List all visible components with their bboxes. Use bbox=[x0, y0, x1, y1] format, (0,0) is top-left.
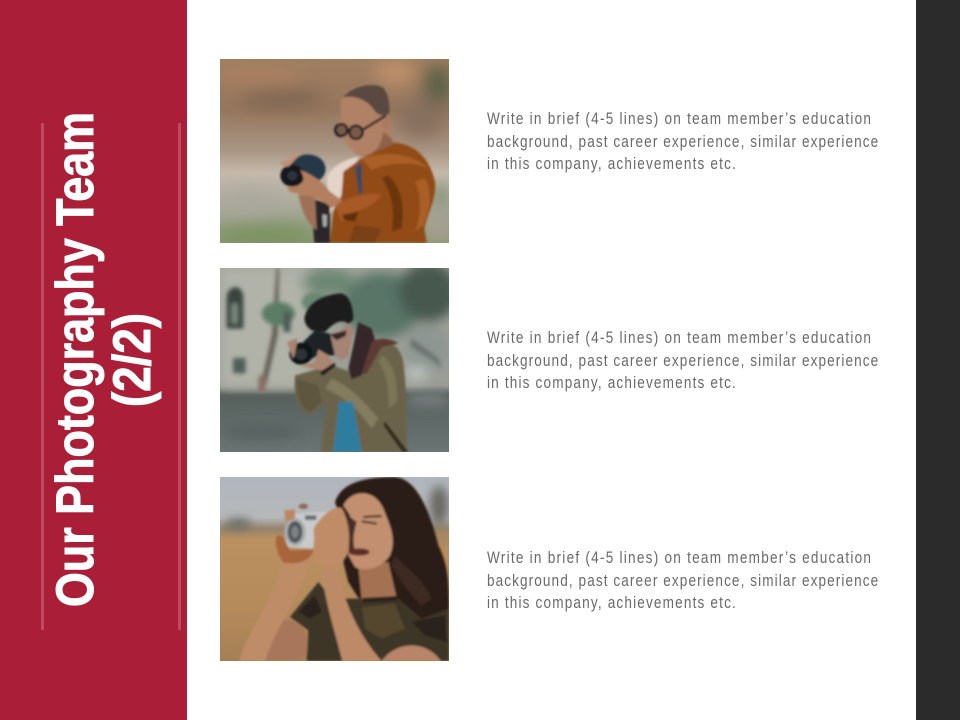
text: third member bio bbox=[487, 549, 878, 612]
text: second member bio bbox=[487, 329, 878, 392]
hands bbox=[276, 535, 313, 563]
right vertical rule bbox=[178, 123, 181, 630]
face and head bbox=[336, 84, 392, 157]
title: rotated heading bbox=[46, 112, 162, 607]
t-shirt bbox=[290, 582, 449, 661]
face bbox=[330, 324, 353, 361]
bag strap bbox=[383, 421, 408, 452]
arms bbox=[322, 565, 382, 661]
eye bbox=[362, 516, 382, 524]
strap bbox=[311, 198, 330, 243]
hair bbox=[304, 294, 353, 332]
face bbox=[343, 493, 393, 569]
camera bbox=[285, 511, 337, 549]
panel: red title sidebar bbox=[0, 0, 187, 720]
text: second member bio: Write in brief (4-5 lines) on team member’s education bbox=[487, 329, 871, 347]
text: third member bio: background, past career experience, similar experience bbox=[487, 572, 878, 590]
blue shirt bbox=[333, 402, 362, 452]
lips bbox=[348, 548, 370, 556]
photo: man with jacket and camera bbox=[220, 268, 449, 452]
text: first member bio: Write in brief (4-5 lines) on team member’s education bbox=[487, 110, 871, 128]
text: second member bio: background, past career experience, similar experience bbox=[487, 352, 878, 370]
camera bbox=[290, 154, 326, 184]
scarf and collar bbox=[348, 322, 376, 379]
hands bbox=[287, 170, 342, 208]
hands bbox=[287, 338, 298, 359]
text: third member bio: in this company, achievements etc. bbox=[487, 594, 736, 612]
jacket bbox=[295, 342, 408, 452]
text: first member bio bbox=[487, 110, 878, 173]
hair bbox=[335, 477, 449, 625]
text: first member bio: in this company, achievements etc. bbox=[487, 155, 736, 173]
glasses bbox=[335, 116, 386, 139]
left vertical rule bbox=[41, 123, 44, 630]
text: second member bio: in this company, achievements etc. bbox=[487, 374, 736, 392]
photo: monk photographer bbox=[220, 59, 449, 243]
robe bbox=[330, 142, 435, 243]
neck bbox=[358, 562, 397, 600]
glasses bbox=[330, 330, 347, 340]
camera bbox=[303, 330, 335, 362]
panel: dark right strip bbox=[916, 0, 960, 720]
photo: woman with vintage camera bbox=[220, 477, 449, 661]
white under-robe bbox=[327, 157, 359, 213]
title: rotated heading: (2/2) bbox=[103, 313, 162, 407]
text: first member bio: background, past career experience, similar experience bbox=[487, 133, 878, 151]
text: third member bio: Write in brief (4-5 lines) on team member’s education bbox=[487, 549, 871, 567]
forearm bbox=[298, 194, 317, 230]
title: rotated heading: Our Photography Team bbox=[46, 112, 105, 607]
